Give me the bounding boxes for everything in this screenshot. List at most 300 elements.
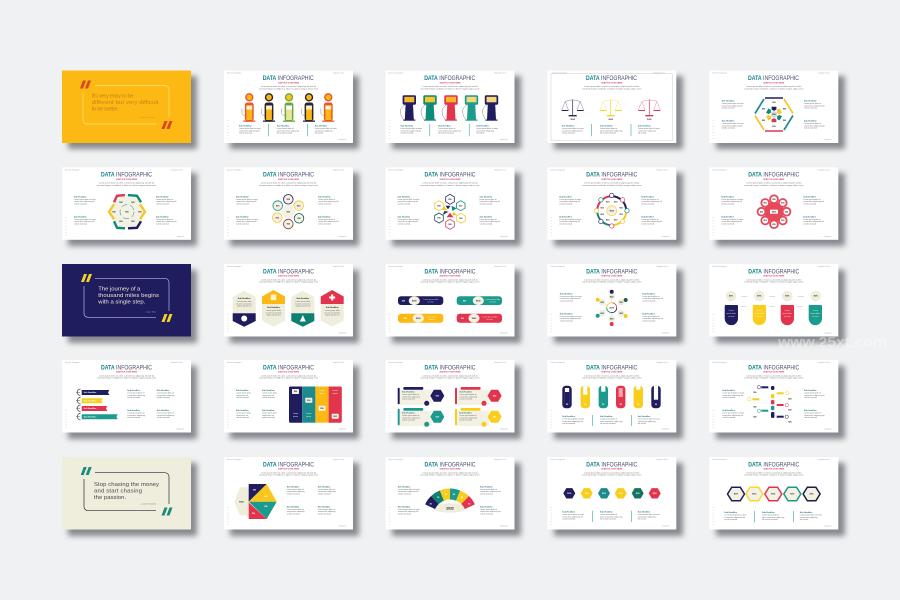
footer: Infographic — [338, 332, 347, 334]
header: Infographic Deck — [332, 169, 345, 171]
header — [227, 459, 345, 477]
header: Infographic Deck — [494, 362, 506, 364]
text blocks: Lorem ipsum dolor sit — [156, 218, 174, 221]
module yellow — [455, 408, 502, 427]
circle diagram: $00 — [287, 199, 291, 201]
text blocks: Infographic — [500, 236, 508, 238]
header: Business Infographic — [65, 169, 80, 171]
hexagon diagram: $00 — [772, 114, 777, 116]
header — [388, 266, 506, 284]
tab crimson: Lorem — [785, 310, 790, 312]
text blocks: Sub Headline — [127, 390, 141, 392]
pill teal: sit amet — [490, 300, 496, 304]
header — [550, 362, 668, 380]
text blocks: Lorem ipsum dolor sit amet, — [721, 198, 744, 201]
module crimson: Lorem ipsum dolor sit — [459, 393, 477, 396]
tubes chart: $0 — [620, 404, 623, 406]
pill teal: Lorem ipsum dolor — [486, 299, 501, 301]
ribbon navy: Sub Headline — [84, 392, 97, 394]
header: SUBTITLE GOES HERE — [278, 469, 300, 471]
hexagon pie: $00 — [252, 513, 256, 515]
header: Lorem ipsum dolor sit amet, consectetur adipiscing elit sed do — [422, 471, 478, 474]
text columns: Sub Headline — [239, 126, 253, 128]
header: eiusmod tempor incididunt ut labore et dolore magna aliqua enim — [259, 377, 318, 380]
flower diagram: $00 — [781, 220, 785, 222]
hexagon diagram: $00 — [112, 211, 117, 213]
text blocks: sed do eiusmod. — [398, 203, 411, 205]
text columns: elit sed do eiusmod. — [600, 132, 616, 134]
scale crimson: $000 — [647, 119, 652, 121]
column chart: $00 — [294, 391, 298, 393]
wheel diagram: $00 — [601, 214, 605, 216]
text columns: consectetur adipiscing — [476, 129, 494, 132]
column teal: adipiscing elit sed — [296, 305, 310, 308]
flower diagram: $00 — [785, 211, 789, 213]
header: SUBTITLE GOES HERE — [763, 372, 785, 374]
text blocks: Lorem ipsum dolor sit — [804, 412, 822, 415]
header: Business Infographic — [227, 72, 242, 74]
header: DATA INFOGRAPHIC — [424, 269, 476, 275]
text blocks: Lorem ipsum dolor sit amet, — [560, 315, 582, 318]
text blocks: sed do eiusmod. — [804, 397, 818, 399]
hexagon diagram: $00 — [448, 224, 453, 226]
text blocks: Sub Headline — [560, 293, 573, 295]
quote author: - Lao Tzu — [145, 311, 156, 313]
text blocks: consectetur adipiscing elit — [559, 220, 580, 223]
text blocks: Sub Headline — [804, 390, 818, 392]
closing quote mark — [162, 508, 172, 516]
hexagon row: $0% — [734, 494, 738, 496]
text blocks: Sub Headline — [398, 196, 411, 198]
value circles: $0% — [785, 296, 790, 298]
slide 7: ring of circles — [224, 167, 353, 240]
arc chart: $0 — [468, 504, 471, 506]
text blocks: Sub Headline — [721, 216, 735, 218]
text blocks: sed do eiusmod. — [480, 223, 493, 225]
header: DATA INFOGRAPHIC — [424, 76, 476, 82]
header: eiusmod tempor incididunt ut labore et dolore magna aliqua enim — [582, 377, 642, 380]
header: SUBTITLE GOES HERE — [439, 469, 461, 471]
text blocks: Sub Headline — [803, 196, 817, 198]
header: SUBTITLE GOES HERE — [601, 179, 623, 181]
text blocks: consectetur adipiscing elit — [236, 200, 257, 203]
text blocks: Sub Headline — [560, 313, 573, 315]
text blocks: consectetur adipiscing elit — [318, 200, 339, 203]
slide 19: tubes — [547, 360, 676, 432]
chain diagram: $00 — [753, 406, 758, 408]
text blocks: Sub Headline — [156, 216, 170, 218]
text blocks: Lorem ipsum dolor — [262, 413, 277, 415]
text columns: Sub Headline — [400, 126, 414, 128]
header: Business Infographic — [388, 72, 403, 74]
opening quote mark — [81, 467, 92, 475]
text columns: consectetur adipiscing elit — [724, 516, 745, 519]
text blocks: Sub Headline — [318, 506, 331, 508]
header: Business Infographic — [65, 362, 80, 364]
text blocks: sed do eiusmod. — [804, 108, 818, 110]
opening quote mark — [80, 80, 91, 88]
text columns: Sub Headline — [315, 126, 328, 128]
text columns: Sub Headline — [638, 512, 651, 514]
hexagon diagram: $00 — [783, 109, 787, 111]
text blocks: sed do eiusmod. — [318, 493, 331, 495]
quote text: It's very easy to be — [92, 93, 134, 99]
text blocks: Infographic — [338, 428, 347, 430]
header: Infographic Deck — [332, 72, 345, 74]
header: eiusmod tempor incididunt ut labore et dolore magna aliqua enim — [582, 281, 642, 284]
header: Business Infographic — [227, 459, 242, 461]
text columns: elit sed do. — [315, 132, 324, 134]
header: SUBTITLE GOES HERE — [116, 372, 138, 374]
text columns: Lorem ipsum dolor sit amet, — [562, 127, 584, 130]
header: Infographic Deck — [332, 362, 345, 364]
text blocks: consectetur adipiscing elit — [804, 394, 825, 397]
quote author: - Lorem Ipsum — [138, 117, 155, 119]
text blocks: Sub Headline — [127, 410, 141, 412]
header: DATA INFOGRAPHIC — [586, 269, 638, 275]
header: eiusmod tempor incididunt ut labore et dolore magna aliqua enim — [744, 87, 804, 90]
text columns: Sub Headline — [762, 512, 776, 514]
column crimson — [321, 290, 344, 327]
text blocks: Sub Headline — [803, 216, 817, 218]
text blocks — [551, 293, 670, 334]
column yellow — [262, 290, 285, 327]
header: DATA INFOGRAPHIC — [586, 173, 638, 179]
text blocks: sed do eiusmod. — [642, 300, 656, 302]
hexagon pie — [234, 484, 277, 519]
text columns: Sub Headline — [438, 126, 452, 128]
header: Business Infographic — [712, 459, 727, 461]
text blocks: Lorem ipsum dolor — [262, 393, 277, 395]
text blocks: consectetur elit — [236, 394, 249, 397]
text blocks: consectetur adipiscing elit — [398, 200, 419, 203]
text columns: Infographic — [824, 526, 832, 528]
text blocks: sed do eiusmod. — [127, 417, 141, 419]
hexagon row: $0% — [602, 493, 606, 495]
header: DATA INFOGRAPHIC — [101, 173, 153, 179]
kiosk red — [442, 95, 458, 121]
module teal: $00 — [436, 416, 440, 418]
text blocks — [551, 196, 670, 238]
header: Lorem ipsum dolor sit amet, consectetur adipiscing elit sed do — [99, 374, 154, 377]
text columns: Sub Headline — [800, 512, 813, 514]
text blocks: consectetur adipiscing elit — [156, 220, 177, 223]
text blocks: sed do eiusmod. — [236, 223, 250, 225]
text blocks: Sub Headline — [262, 390, 276, 392]
wheel diagram: $00 — [620, 208, 624, 210]
tab navy: sit amet — [728, 315, 735, 318]
wheel diagram: $00 — [614, 202, 618, 204]
column navy: Lorem ipsum dolor — [237, 301, 252, 303]
slide 20: vertical chain — [709, 360, 838, 432]
header: eiusmod tempor incididunt ut labore et dolore magna aliqua enim — [420, 184, 480, 187]
header: Lorem ipsum dolor sit amet, consectetur adipiscing elit sed do — [422, 182, 478, 185]
hexagon diagram: $00 — [437, 205, 442, 207]
header: Business Infographic — [227, 266, 242, 268]
tab navy — [725, 305, 738, 325]
text blocks: sed do eiusmod. — [480, 513, 494, 515]
header: DATA INFOGRAPHIC — [586, 365, 638, 371]
hexagon diagram: $00 — [437, 218, 442, 220]
header: Infographic Deck — [494, 169, 506, 171]
text blocks: consectetur adipiscing — [318, 490, 335, 493]
module yellow: consectetur adipiscing — [459, 416, 477, 419]
header: DATA INFOGRAPHIC — [263, 269, 315, 275]
text blocks: Sub Headline — [804, 100, 818, 102]
quote text: the passion. — [94, 495, 126, 501]
header: DATA INFOGRAPHIC — [101, 365, 153, 371]
text columns: consectetur adipiscing — [800, 516, 817, 519]
arc chart: $0 — [461, 497, 464, 499]
text columns: amet consectetur adipiscing — [600, 129, 622, 132]
text blocks: Sub Headline — [642, 313, 656, 315]
header: Business Infographic — [712, 72, 727, 74]
text blocks — [390, 486, 508, 528]
module yellow: Sub Headline — [459, 412, 473, 414]
text columns: Sub Headline — [600, 126, 614, 128]
text blocks: sed do eiusmod. — [560, 300, 573, 302]
text blocks: Lorem ipsum dolor sit amet, — [398, 508, 420, 511]
header: Lorem ipsum dolor sit amet, consectetur adipiscing elit sed do — [584, 471, 639, 474]
flower diagram: $00 — [764, 220, 768, 222]
header: SUBTITLE GOES HERE — [763, 276, 785, 278]
kiosk navy — [482, 95, 498, 121]
quote text: thousand miles begins — [98, 293, 159, 299]
text columns: sed do eiusmod. — [562, 423, 576, 425]
flower diagram: $00 — [764, 203, 768, 205]
column chart: Lorem — [319, 390, 325, 392]
text blocks: Lorem ipsum dolor sit amet, — [559, 198, 582, 201]
text blocks: consectetur adipiscing — [127, 394, 145, 397]
header: eiusmod tempor incididunt ut labore et dolore magna aliqua enim — [420, 377, 480, 380]
header: eiusmod tempor incididunt ut labore et dolore magna aliqua enim — [744, 377, 804, 380]
header: Business Infographic — [550, 459, 565, 461]
header: Lorem ipsum dolor sit amet, consectetur adipiscing elit sed do — [99, 182, 154, 185]
text blocks: consectetur adipiscing elit — [804, 104, 825, 107]
header — [227, 266, 345, 284]
text columns: sed do eiusmod. — [562, 518, 576, 520]
text columns: Lorem ipsum dolor sit amet, — [562, 513, 585, 516]
text blocks: sed do eiusmod. — [480, 203, 493, 205]
header: Business Infographic — [552, 72, 567, 74]
header: SUBTITLE GOES HERE — [278, 372, 300, 374]
tubes chart: $0 — [602, 404, 605, 406]
pill yellow: dolor sit — [428, 318, 435, 321]
tab teal — [809, 305, 822, 325]
header: Business Infographic — [388, 266, 403, 268]
text blocks: sed do eiusmod. — [722, 417, 736, 419]
header — [227, 169, 345, 187]
column teal: Sub Headline — [296, 298, 310, 300]
text blocks: consectetur adipiscing elit — [642, 297, 663, 300]
text blocks — [66, 390, 185, 430]
circle diagram: $00 — [297, 218, 302, 220]
pill navy: sit amet — [428, 300, 434, 304]
text blocks: Infographic — [176, 428, 185, 430]
header: SUBTITLE GOES HERE — [763, 179, 785, 181]
pill crimson: sit amet — [486, 318, 493, 321]
text blocks: Lorem ipsum dolor sit amet, — [398, 218, 420, 221]
text columns: Lorem ipsum dolor sit amet, — [638, 513, 660, 516]
text blocks: sed do eiusmod. — [642, 320, 656, 322]
text blocks: Lorem ipsum dolor sit — [803, 218, 821, 221]
text blocks: consectetur adipiscing elit — [722, 124, 743, 127]
radial diagram — [596, 290, 628, 326]
text blocks: Sub Headline — [287, 506, 300, 508]
header — [550, 266, 668, 284]
text blocks: Lorem ipsum dolor sit amet, — [398, 488, 420, 491]
text blocks: consectetur adipiscing — [287, 510, 304, 513]
header — [712, 266, 830, 284]
quote text: with a single step. — [97, 300, 146, 306]
chain diagram: $00 — [753, 392, 758, 394]
text columns: Lorem ipsum dolor sit amet, — [239, 127, 262, 130]
column yellow: Sub Headline — [267, 307, 281, 309]
header: Infographic Deck — [170, 169, 183, 171]
hexagon diagram: $00 — [459, 205, 463, 207]
tubes chart — [562, 386, 661, 408]
module yellow: Lorem ipsum dolor sit — [459, 414, 477, 417]
pump orange — [242, 94, 255, 122]
value circles — [726, 291, 821, 301]
quote frame — [83, 86, 169, 124]
text blocks: sed do eiusmod. — [318, 203, 332, 205]
arc chart: $0 — [453, 494, 456, 496]
radial diagram: $00 — [620, 313, 624, 315]
text columns: consectetur adipiscing elit — [562, 129, 583, 132]
text blocks: Sub Headline — [480, 486, 494, 488]
text blocks: Lorem ipsum dolor sit amet, — [722, 102, 744, 105]
text blocks: Lorem ipsum dolor sit amet, — [236, 218, 259, 221]
wheel diagram: $00 — [606, 220, 610, 222]
header — [552, 72, 665, 90]
text blocks: sed do eiusmod. — [236, 203, 250, 205]
header: Lorem ipsum dolor sit amet, consectetur adipiscing elit sed do — [584, 85, 639, 88]
text blocks: Lorem ipsum dolor sit amet, — [74, 218, 97, 221]
text blocks: consectetur adipiscing — [318, 510, 335, 513]
text blocks: Sub Headline — [480, 506, 494, 508]
text blocks: sed do eiusmod. — [236, 417, 250, 419]
module crimson: consectetur adipiscing — [459, 395, 477, 398]
value circles: $0% — [814, 296, 818, 298]
text blocks: sed do eiusmod. — [803, 203, 817, 205]
text columns: Lorem ipsum dolor sit amet, — [562, 418, 585, 421]
header: eiusmod tempor incididunt ut labore et dolore magna aliqua enim — [259, 474, 318, 477]
text columns — [551, 507, 670, 528]
slide 4: balance scales — [547, 70, 676, 143]
text columns: consectetur adipiscing elit — [239, 129, 260, 132]
header: Lorem ipsum dolor sit amet, consectetur adipiscing elit sed do — [422, 278, 478, 281]
text columns — [562, 124, 661, 136]
text blocks: Lorem ipsum dolor sit — [127, 392, 145, 395]
header: Infographic Deck — [656, 169, 668, 171]
header: Business Infographic — [388, 169, 403, 171]
header: eiusmod tempor incididunt ut labore et dolore magna aliqua enim — [420, 474, 480, 477]
pill crimson: Lorem ipsum dolor — [482, 316, 498, 318]
quote frame — [84, 278, 169, 317]
thin frame — [551, 74, 672, 140]
header: SUBTITLE GOES HERE — [439, 82, 461, 84]
text columns: Sub Headline — [724, 512, 738, 514]
text blocks: Sub Headline — [480, 216, 493, 218]
slide 14: radial dots — [547, 264, 676, 336]
header — [550, 459, 668, 477]
text blocks: consectetur adipiscing — [157, 394, 174, 397]
header: eiusmod tempor incididunt ut labore et dolore magna aliqua enim — [97, 377, 156, 380]
text blocks: Sub Headline — [641, 196, 655, 198]
text blocks: Lorem ipsum dolor sit — [804, 122, 822, 125]
hexagon row: $0% — [810, 494, 814, 496]
text blocks: Sub Headline — [559, 196, 573, 198]
text blocks: Lorem ipsum dolor sit — [641, 198, 659, 201]
slide 13: pills — [386, 264, 514, 336]
header: Lorem ipsum dolor sit amet, consectetur adipiscing elit sed do — [746, 374, 801, 377]
text blocks: Lorem ipsum dolor sit — [480, 218, 497, 221]
closing quote mark — [162, 314, 172, 322]
text blocks: Lorem ipsum dolor sit amet, — [74, 198, 97, 201]
footer: Infographic — [500, 428, 508, 430]
text blocks — [713, 390, 832, 430]
header: SUBTITLE GOES HERE — [601, 276, 623, 278]
header: eiusmod tempor incididunt ut labore et dolore magna aliqua enim — [420, 281, 480, 284]
slide 6: segmented hexagon — [62, 167, 191, 240]
text blocks: consectetur elit — [262, 394, 275, 397]
module crimson: sed do eiusmod. — [459, 398, 473, 400]
header — [388, 169, 506, 187]
text blocks: consectetur adipiscing elit — [722, 394, 743, 397]
text columns: Infographic — [662, 526, 670, 528]
text blocks: Sub Headline — [262, 410, 276, 412]
text blocks: sed do eiusmod. — [127, 397, 141, 399]
text columns: Lorem ipsum dolor sit — [600, 127, 618, 130]
text blocks: Sub Headline — [804, 410, 818, 412]
header: Business Infographic — [712, 362, 727, 364]
text blocks: Lorem ipsum dolor sit — [318, 508, 335, 511]
text blocks: sed do eiusmod. — [318, 223, 332, 225]
text blocks: Sub Headline — [722, 120, 735, 122]
hexagon pie: $00 — [264, 506, 269, 508]
text columns: Sub Headline — [600, 512, 614, 514]
header: eiusmod tempor incididunt ut labore et dolore magna aliqua enim — [420, 87, 480, 90]
wheel diagram: $00 — [606, 202, 610, 204]
quote text — [97, 287, 159, 306]
pill teal: $00 — [463, 300, 467, 302]
tab crimson: ipsum dolor — [783, 313, 792, 315]
flower diagram: $00 — [781, 203, 785, 205]
pill teal — [457, 296, 502, 305]
header: eiusmod tempor incididunt ut labore et dolore magna aliqua enim — [582, 87, 642, 90]
text blocks: Lorem ipsum dolor sit — [287, 488, 304, 491]
text blocks: Infographic — [824, 428, 832, 430]
pill crimson: $00 — [461, 318, 465, 320]
header: Infographic Deck — [494, 266, 506, 268]
column chart — [289, 386, 342, 423]
module teal — [398, 408, 444, 427]
header: SUBTITLE GOES HERE — [278, 179, 300, 181]
header — [227, 362, 345, 380]
slide 1: yellow quote — [62, 70, 191, 143]
scale navy: $000 — [570, 119, 576, 121]
text blocks: Infographic — [338, 526, 347, 528]
kiosk teal — [421, 95, 437, 121]
text blocks: consectetur adipiscing elit — [318, 220, 339, 223]
text blocks: Lorem ipsum dolor sit — [804, 102, 822, 105]
column teal — [291, 291, 314, 327]
text blocks: consectetur adipiscing elit — [156, 200, 177, 203]
header: SUBTITLE GOES HERE — [116, 179, 138, 181]
text blocks: consectetur adipiscing elit — [480, 510, 501, 513]
hexagon diagram: $00 — [762, 120, 766, 122]
